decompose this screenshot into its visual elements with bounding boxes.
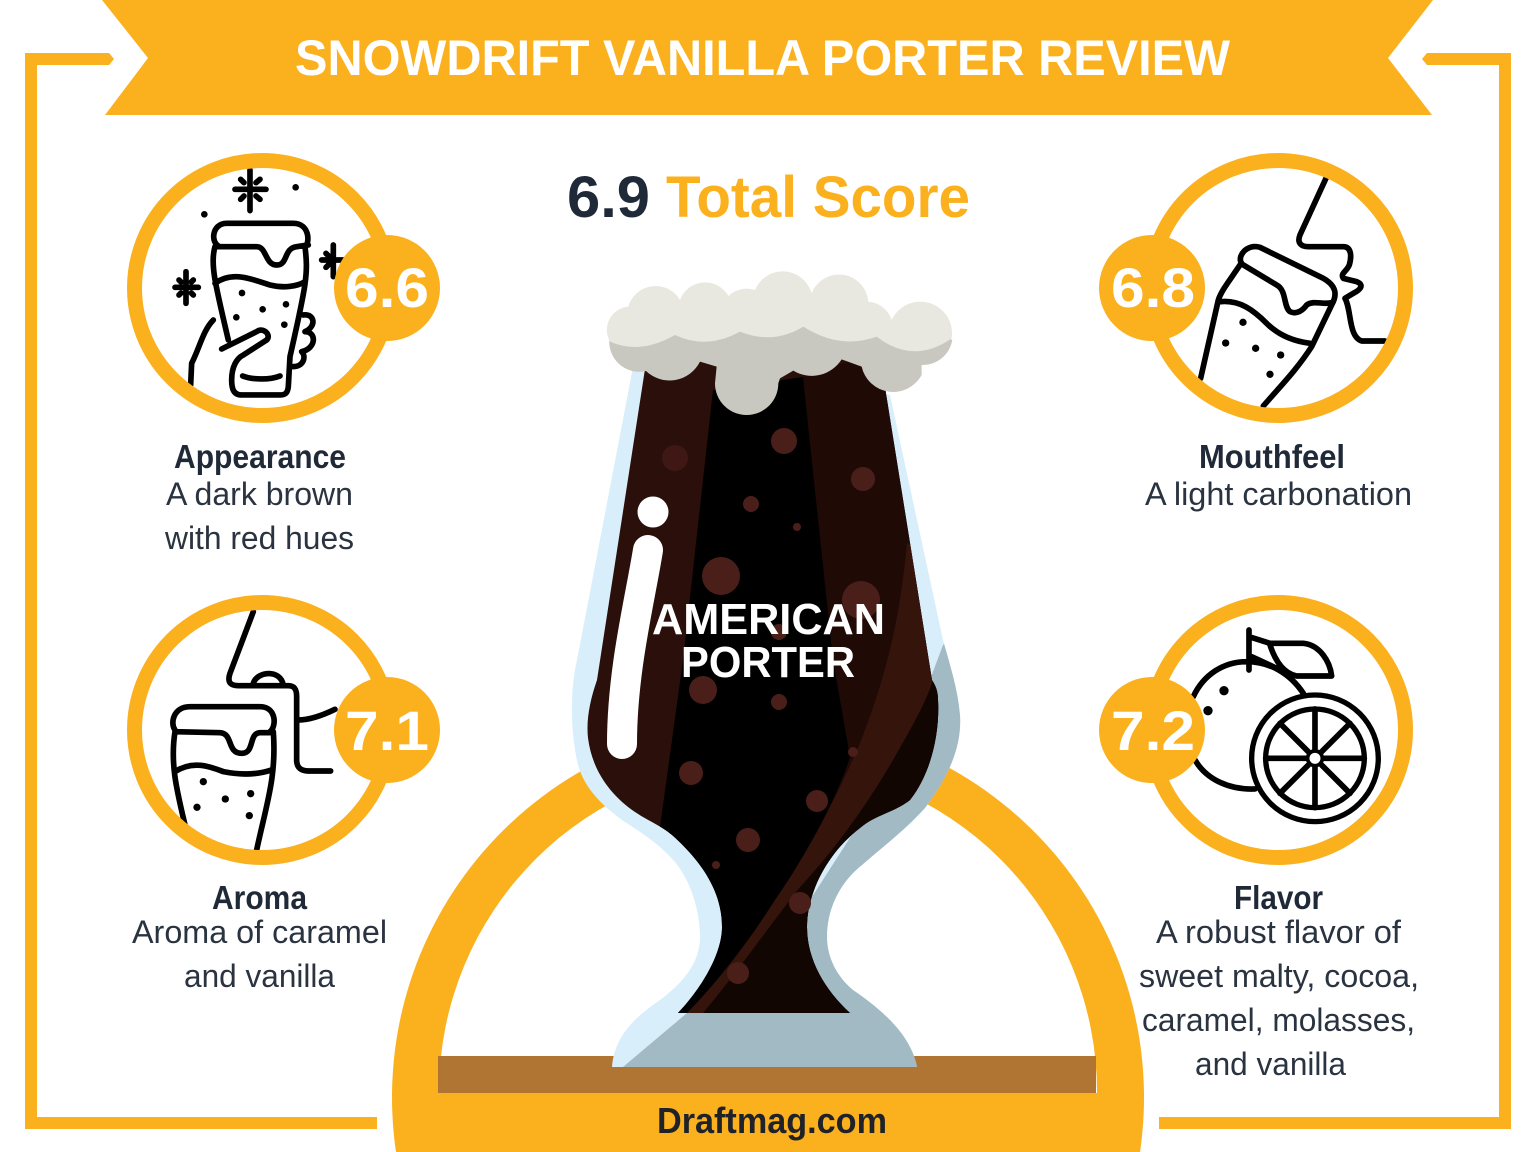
score badge (334, 235, 440, 341)
description: with red hues (164, 520, 354, 556)
title banner (102, 0, 1433, 115)
beer style label (652, 595, 885, 687)
heading: Appearance (174, 438, 346, 475)
description: A light carbonation (1145, 476, 1412, 512)
score badge: 6.8 (1111, 256, 1195, 319)
heading: Mouthfeel (1199, 438, 1345, 475)
score badge (334, 677, 440, 783)
total score heading: 6.9 (567, 165, 650, 230)
score badge: 6.6 (345, 256, 429, 319)
beer style label: AMERICAN (652, 595, 885, 644)
score badge (1099, 677, 1205, 783)
description: caramel, molasses, (1142, 1002, 1415, 1038)
icon: smelling beer (173, 612, 335, 850)
score badge: 7.1 (345, 699, 429, 762)
beer liquid (588, 359, 938, 1013)
ring (134, 160, 390, 416)
description: sweet malty, cocoa, (1139, 958, 1419, 994)
beer style label: PORTER (681, 638, 855, 687)
description (1139, 914, 1419, 1082)
icon: hand holding beer (175, 170, 343, 395)
heading: Flavor (1234, 879, 1323, 916)
description: and vanilla (184, 958, 335, 994)
panel: mouthfeel (1099, 160, 1412, 512)
score badge: 7.2 (1111, 699, 1195, 762)
panel: appearance (134, 160, 440, 556)
description: A robust flavor of (1156, 914, 1401, 950)
ring (1150, 160, 1406, 416)
total score heading: Total Score (666, 165, 970, 230)
icon: orange and slice (1193, 630, 1378, 822)
glass highlight (622, 496, 668, 744)
description (164, 476, 354, 556)
source credit: Draftmag.com (657, 1100, 887, 1141)
description: A dark brown (166, 476, 353, 512)
description: and vanilla (1195, 1046, 1346, 1082)
bubbles (662, 428, 880, 984)
beer glass illustration (572, 272, 960, 1067)
panel: aroma (132, 602, 440, 994)
orange arch behind glass (392, 721, 1144, 1152)
description: Aroma of caramel (132, 914, 387, 950)
panel: flavor (1099, 602, 1419, 1082)
score badge (1099, 235, 1205, 341)
glass body (572, 371, 960, 1067)
icon: sipping beer (1201, 178, 1385, 406)
ring (134, 602, 390, 858)
beer foam (607, 271, 952, 415)
description (132, 914, 387, 994)
ring (1150, 602, 1406, 858)
heading: Aroma (212, 879, 308, 916)
title banner: SNOWDRIFT VANILLA PORTER REVIEW (295, 30, 1231, 86)
